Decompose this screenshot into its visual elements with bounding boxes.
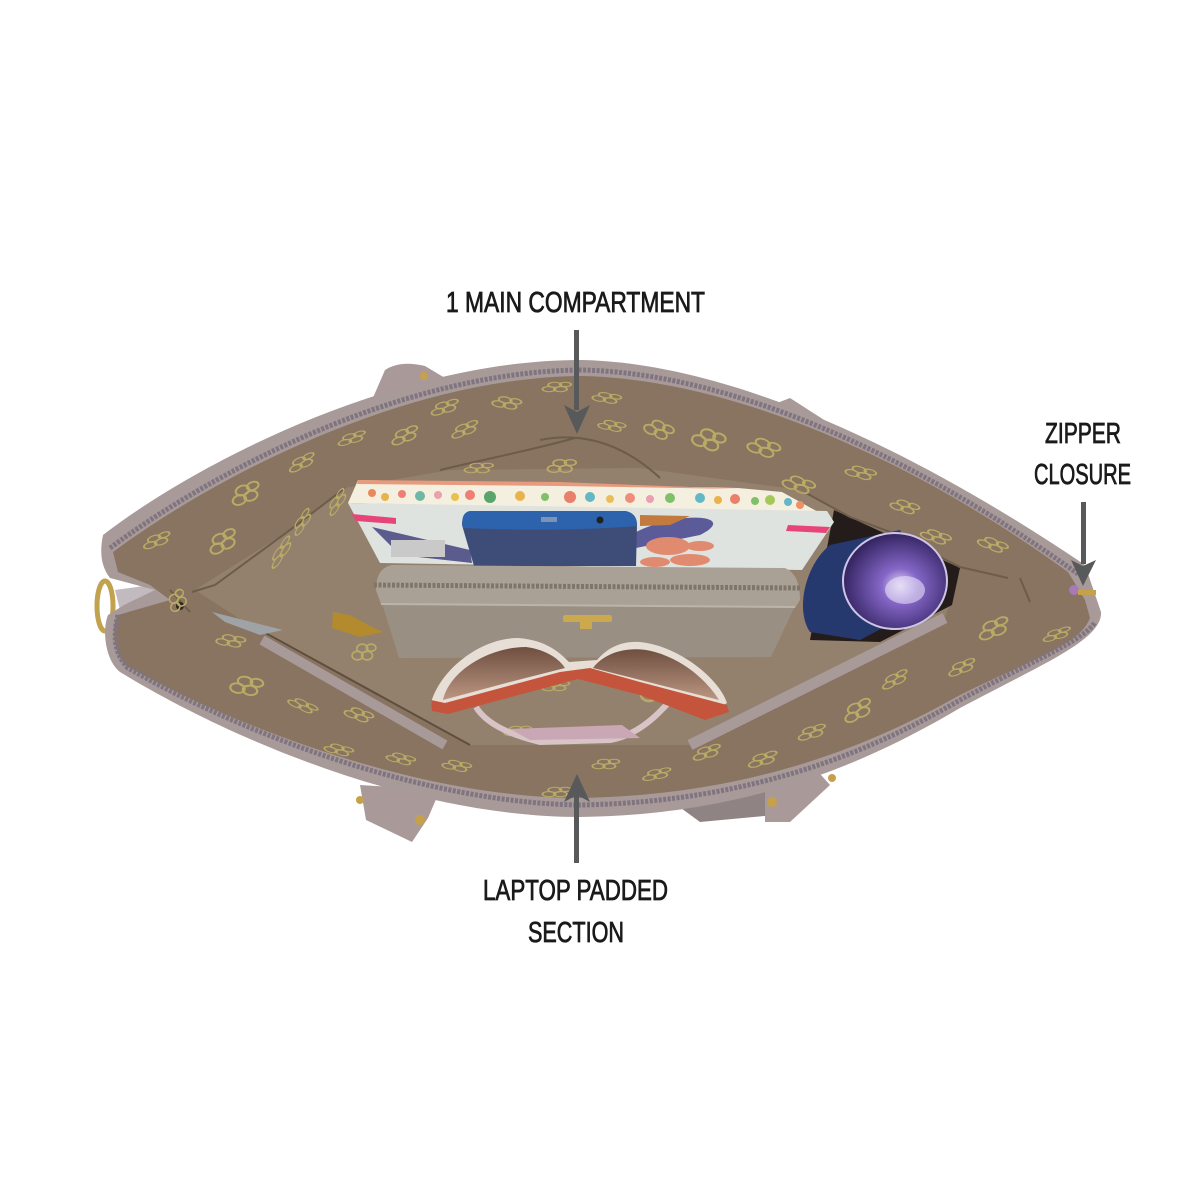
lining base — [113, 376, 1090, 798]
pocket trims — [262, 640, 445, 745]
outer shell — [101, 360, 1101, 817]
label: 1 main compartment: 1 MAIN COMPARTMENT — [446, 287, 705, 319]
floral band — [368, 489, 804, 509]
key charm — [332, 612, 383, 637]
label: zipper closure — [1034, 418, 1131, 491]
lining folds — [170, 437, 1030, 745]
label: laptop padded section — [483, 875, 668, 949]
label: laptop padded section: LAPTOP PADDED — [483, 875, 668, 907]
wallet — [374, 565, 800, 658]
label: laptop padded section: SECTION — [528, 917, 624, 949]
left corner pocket hole and silver tag — [176, 602, 283, 635]
arrow: main compartment — [564, 330, 590, 434]
white temple loop — [476, 703, 668, 742]
notebook — [348, 480, 834, 570]
lining pattern — [142, 382, 1072, 797]
interior well — [195, 468, 960, 745]
arrow: laptop padded section — [564, 774, 590, 863]
arrow: zipper closure — [1071, 502, 1096, 586]
bag — [97, 360, 1101, 842]
zipper lines — [110, 370, 1095, 805]
zipper pull — [1069, 585, 1096, 595]
shadow behind bottle — [810, 510, 960, 642]
handle loops and gold hardware — [97, 364, 836, 842]
label: zipper closure: CLOSURE — [1034, 459, 1131, 491]
phone — [462, 511, 637, 566]
sunglasses — [431, 638, 729, 742]
label: zipper closure: ZIPPER — [1045, 418, 1121, 450]
water bottle — [803, 530, 947, 640]
